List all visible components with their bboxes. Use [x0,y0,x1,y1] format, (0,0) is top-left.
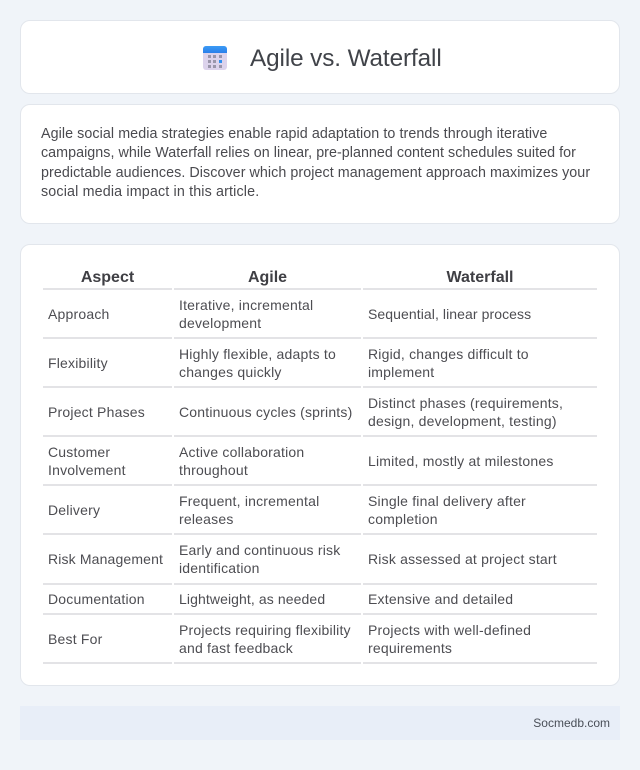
row: Customer Involvement: Limited, mostly at milestones [368,453,554,469]
row: Approach: Approach [48,306,110,322]
row: Customer Involvement: throughout [179,462,248,478]
row: Approach: Sequential, linear process [368,306,531,322]
row: Customer Involvement: Customer [48,444,110,460]
row: Flexibility: implement [368,364,434,380]
row: Best For: Best For [48,631,103,647]
intro text: predictable audiences. Discover which project management approach maximizes your [41,165,590,181]
table header: Aspect [81,269,134,286]
row: Flexibility: changes quickly [179,364,282,380]
table header: Waterfall [446,269,513,286]
row: Best For: requirements [368,640,452,656]
row: Best For: Projects with well-defined [368,622,531,638]
row: Project Phases: design, development, testing) [368,413,557,429]
row: Project Phases: Project Phases [48,404,145,420]
row: Customer Involvement: Involvement [48,462,126,478]
intro text: social media impact in this article. [41,184,259,200]
comparison table [43,269,597,664]
row: Project Phases [43,395,597,437]
row: Project Phases: Continuous cycles (sprints) [179,404,352,420]
table header [43,269,597,290]
footer source text: Socmedb.com [533,716,610,730]
row: Risk Management: Risk Management [48,551,163,567]
row: Approach [43,297,597,339]
row: Delivery: Single final delivery after [368,493,526,509]
row: Documentation: Extensive and detailed [368,591,513,607]
row: Delivery: Delivery [48,502,100,518]
row: Approach: Iterative, incremental [179,297,313,313]
row: Best For [43,622,597,664]
row: Best For: and fast feedback [179,640,293,656]
intro panel [20,104,620,224]
row: Approach: development [179,315,261,331]
row: Best For: Projects requiring flexibility [179,622,351,638]
row: Delivery: completion [368,511,438,527]
row: Delivery: Frequent, incremental [179,493,319,509]
row: Delivery: releases [179,511,234,527]
intro text [41,126,590,200]
row: Documentation: Documentation [48,591,145,607]
row: Delivery [43,493,597,535]
row: Risk Management: Early and continuous risk [179,542,340,558]
row: Documentation: Lightweight, as needed [179,591,325,607]
title: Agile vs. Waterfall [250,45,442,72]
footer bar [20,706,620,740]
row: Customer Involvement [43,444,597,486]
row: Documentation [43,591,597,615]
row: Flexibility [43,346,597,388]
row: Flexibility: Flexibility [48,355,108,371]
table header: Agile [248,269,287,286]
icon: calendar [203,46,227,70]
row: Flexibility: Rigid, changes difficult to [368,346,529,362]
intro text: Agile social media strategies enable rapid adaptation to trends through iterative [41,126,547,142]
row: Flexibility: Highly flexible, adapts to [179,346,336,362]
row: Risk Management: identification [179,560,260,576]
table panel [20,244,620,686]
row: Project Phases: Distinct phases (requirements, [368,395,563,411]
header panel [20,20,620,94]
intro text: campaigns, while Waterfall relies on linear, pre-planned content schedules suited for [41,145,576,161]
row: Risk Management: Risk assessed at project start [368,551,557,567]
row: Customer Involvement: Active collaboration [179,444,304,460]
row: Risk Management [43,542,597,585]
